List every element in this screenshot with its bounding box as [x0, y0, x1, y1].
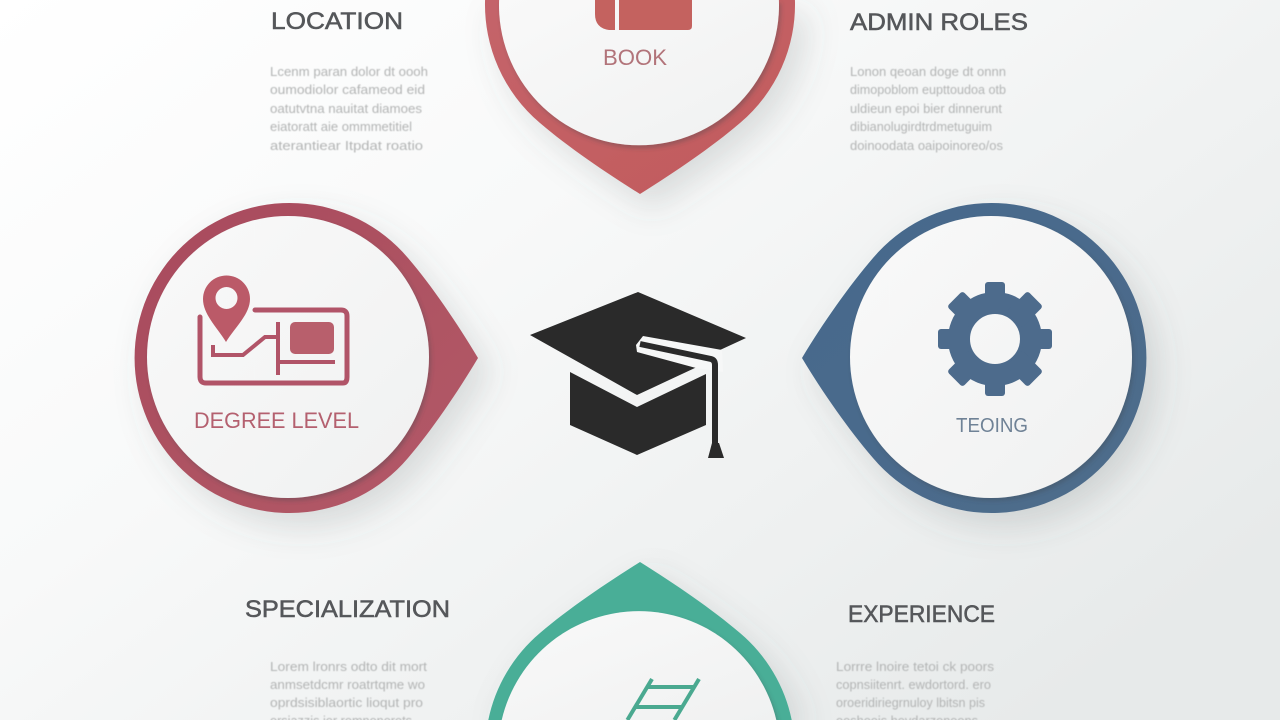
- text block: experience: oroeridiriegrnuloy lbitsn pis: [836, 695, 985, 710]
- text block: admin roles: dibianolugirdtrdmetuguim: [850, 119, 992, 134]
- white disc: [850, 216, 1132, 498]
- text block: location: oatutvtna nauitat diamoes: [270, 101, 422, 116]
- heading: specialization: SPECIALIZATION: [245, 596, 450, 623]
- label: degree level: DEGREE LEVEL: [194, 408, 359, 433]
- icon: ladder: [627, 679, 699, 720]
- icon: book: [595, 0, 692, 30]
- heading: admin roles: ADMIN ROLES: [850, 9, 1028, 36]
- tassel: [708, 443, 724, 458]
- panel: teoing badge: [802, 203, 1146, 513]
- text block: specialization: Lorem lronrs odto dit mort: [270, 659, 427, 674]
- text block: experience: Lorrre lnoire tetoi ck poors: [836, 659, 995, 674]
- label: teoing: TEOING: [956, 415, 1028, 437]
- text block: admin roles: doinoodata oaipoinoreo/os: [850, 138, 1003, 153]
- text block: admin roles: dimopoblom eupttoudoa otb: [850, 82, 1006, 97]
- green teardrop: [488, 562, 792, 720]
- heading: location: LOCATION: [271, 8, 403, 35]
- text block: location: oumodiolor cafameod eid: [270, 82, 425, 97]
- text block: admin roles: uldieun epoi bier dinnerunt: [850, 101, 1002, 116]
- text block: location: aterantiear Itpdat roatio: [270, 138, 423, 153]
- mortarboard: [530, 292, 746, 395]
- icon: map with location pin: [200, 276, 347, 383]
- panel: degree level badge: [135, 203, 478, 513]
- wine teardrop: [135, 203, 478, 513]
- white disc: [499, 0, 779, 145]
- blue teardrop: [802, 203, 1146, 513]
- text block: specialization: oprdsisiblaortic lioqut pro: [270, 695, 423, 710]
- label: book: BOOK: [603, 45, 667, 70]
- panel: specialization text: [245, 596, 450, 720]
- cap body: [570, 372, 706, 455]
- red teardrop: [485, 0, 795, 194]
- icon: gear: [938, 282, 1052, 396]
- icon: graduation cap: [530, 292, 746, 458]
- text block: specialization: anmsetdcmr roatrtqme wo: [270, 677, 425, 692]
- text block: experience: [836, 659, 995, 720]
- text block: admin roles: Lonon qeoan doge dt onnn: [850, 64, 1006, 79]
- panel: book badge: [485, 0, 795, 194]
- text block: experience: copnsiitenrt. ewdortord. ero: [836, 677, 991, 692]
- panel: admin roles text: [850, 9, 1028, 153]
- panel: specialization badge: [488, 562, 792, 720]
- white disc: [502, 611, 776, 720]
- text block: location: [270, 64, 428, 153]
- heading: experience: EXPERIENCE: [848, 601, 995, 628]
- panel: experience text: [836, 601, 995, 720]
- panel: location text: [270, 8, 428, 153]
- tassel cord: [640, 344, 715, 446]
- cord highlight: [636, 336, 723, 372]
- white disc: [147, 216, 429, 498]
- text block: location: Lcenm paran dolor dt oooh: [270, 64, 428, 79]
- text block: admin roles: [850, 64, 1006, 153]
- text block: location: eiatoratt aie ommmetitiel: [270, 119, 412, 134]
- text block: specialization: [270, 659, 427, 720]
